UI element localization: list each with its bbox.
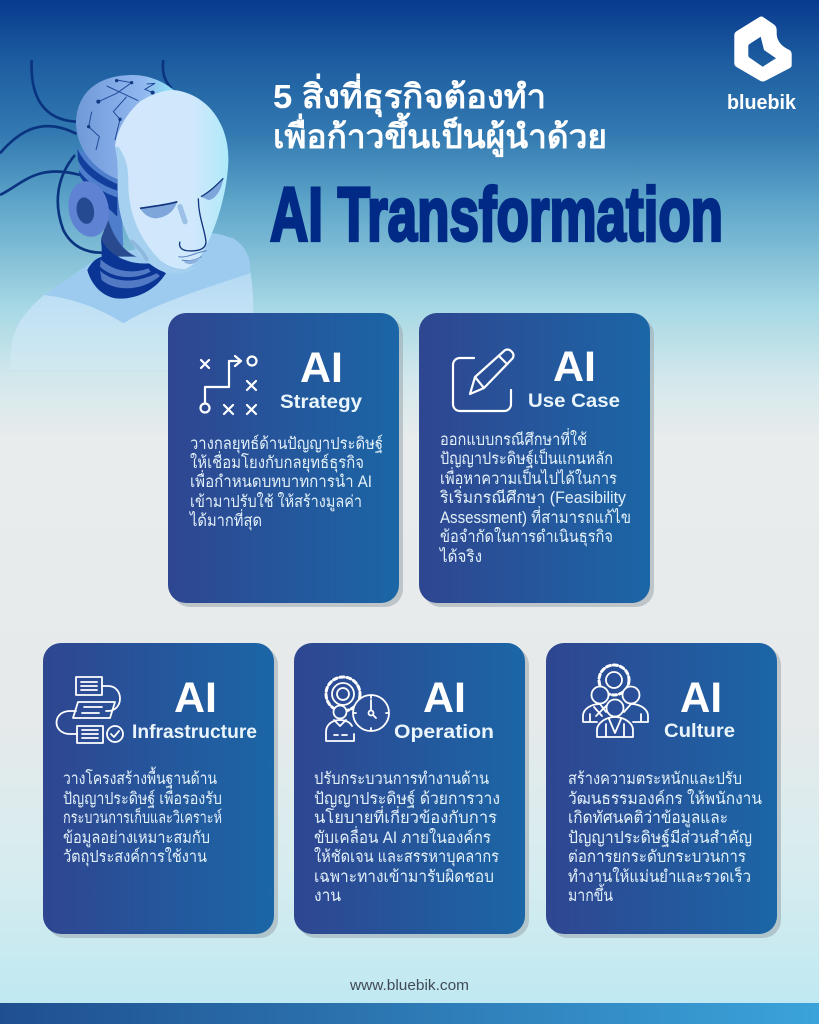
text: use case description: Assessment) ที่สามารถแก้ไข	[440, 506, 631, 527]
heading: AI Use Case	[528, 343, 620, 412]
heading: AI Operation: Operation	[394, 722, 494, 743]
icon: pencil on note	[453, 350, 514, 411]
logo wordmark: bluebik	[727, 92, 797, 114]
text: strategy description	[188, 434, 383, 531]
text: use case description: ข้อจำกัดในการดำเนินธุรกิจ	[440, 527, 613, 547]
text: infrastructure description: ปัญญาประดิษฐ์ เพื่อรองรับ	[63, 787, 222, 808]
heading: AI Operation	[394, 674, 494, 743]
icon: strategy play diagram	[200, 356, 256, 414]
text: infrastructure description: ข้อมูลอย่างเหมาะสมกับ	[63, 829, 210, 848]
text: operation description: ขับเคลื่อน AI ภายในองค์กร	[314, 826, 491, 847]
text: strategy description: วางกลยุทธ์ด้านปัญญาประดิษฐ์	[190, 434, 383, 454]
panel: AI Use Case	[419, 313, 654, 607]
logo: bluebik	[727, 16, 797, 114]
heading: AI Use Case: AI	[553, 343, 596, 391]
heading: AI Operation: AI	[423, 674, 466, 722]
heading: AI Strategy: Strategy	[280, 392, 362, 413]
panel: AI Strategy	[168, 313, 403, 607]
illustration: robot head	[0, 60, 253, 370]
text: culture description: ต่อการยกระดับกระบวนการ	[568, 848, 746, 866]
text: operation description: ปรับกระบวนการทำงานด้าน	[314, 770, 489, 788]
text: culture description: เกิดทัศนคติว่าข้อมูลและ	[568, 809, 728, 828]
text: use case description: ริเริ่มกรณีศึกษา (Feasibility	[439, 486, 627, 507]
text: strategy description: เพื่อกำหนดบทบาทการนำ AI	[190, 470, 372, 491]
text: operation description: ให้ชัดเจน และสรรหาบุคลากร	[314, 847, 499, 867]
title: Thai heading: 5 สิ่งที่ธุรกิจต้องทำ	[273, 73, 546, 118]
text: infrastructure description	[63, 766, 222, 867]
heading: AI Strategy	[280, 344, 362, 413]
text: operation description: งาน	[314, 887, 341, 905]
text: strategy description: ให้เชื่อมโยงกับกลยุทธ์ธุรกิจ	[190, 451, 364, 473]
text: strategy description: ได้มากที่สุด	[188, 509, 262, 531]
title: Thai heading: เพื่อก้าวขึ้นเป็นผู้นำด้วย	[273, 112, 607, 158]
icon: gear, clock and person	[326, 677, 389, 741]
text: strategy description: เข้ามาปรับใช้ ให้สร้างมูลค่า	[190, 492, 362, 512]
text: infrastructure description: กระบวนการเก็บและวิเคราะห์	[63, 807, 222, 827]
heading: AI Strategy: AI	[300, 344, 343, 392]
panel: AI Infrastructure	[43, 643, 278, 938]
text: culture description: ปัญญาประดิษฐ์มีส่วนสำคัญ	[568, 828, 752, 847]
panel: AI Operation	[294, 643, 529, 938]
text: culture description: สร้างความตระหนักและปรับ	[568, 770, 742, 788]
text: use case description: ออกแบบกรณีศึกษาที่ใช้	[440, 428, 587, 449]
title: Thai heading	[273, 73, 607, 158]
text: operation description	[314, 770, 500, 905]
text: culture description	[568, 770, 762, 905]
text: infrastructure description: วัตถุประสงค์การใช้งาน	[63, 847, 207, 867]
text: operation description: เฉพาะทางเข้ามารับผิดชอบ	[314, 868, 494, 886]
panel: AI Culture	[546, 643, 781, 938]
text: use case description: เพื่อหาความเป็นไปได้ในการ	[440, 467, 617, 488]
text: use case description	[438, 428, 631, 566]
heading: AI Infrastructure: AI	[174, 674, 217, 722]
icon: workflow documents	[56, 677, 123, 743]
text: culture description: วัฒนธรรมองค์กร ให้พนักงาน	[568, 789, 762, 808]
heading: AI Culture	[664, 674, 735, 742]
text: infrastructure description: วางโครงสร้างพื้นฐานด้าน	[63, 766, 217, 788]
text: culture description: มากขึ้น	[568, 883, 613, 905]
icon: team with gear	[583, 665, 648, 737]
text: use case description: ได้จริง	[438, 547, 482, 566]
heading: AI Culture: AI	[680, 674, 722, 722]
text: use case description: ปัญญาประดิษฐ์เป็นแกนหลัก	[440, 448, 613, 468]
heading: AI Infrastructure: Infrastructure	[132, 722, 257, 743]
footer bar	[0, 1003, 819, 1024]
heading: AI Infrastructure	[132, 674, 257, 743]
text: culture description: ทำงานให้แม่นยำและรวดเร็ว	[568, 866, 751, 886]
text: operation description: นโยบายที่เกี่ยวข้องกับการ	[314, 806, 497, 827]
footer url: www.bluebik.com	[349, 977, 469, 994]
heading: AI Use Case: Use Case	[528, 391, 620, 412]
text: operation description: ปัญญาประดิษฐ์ ด้วยการวาง	[314, 789, 500, 808]
heading: AI Culture: Culture	[664, 721, 735, 742]
